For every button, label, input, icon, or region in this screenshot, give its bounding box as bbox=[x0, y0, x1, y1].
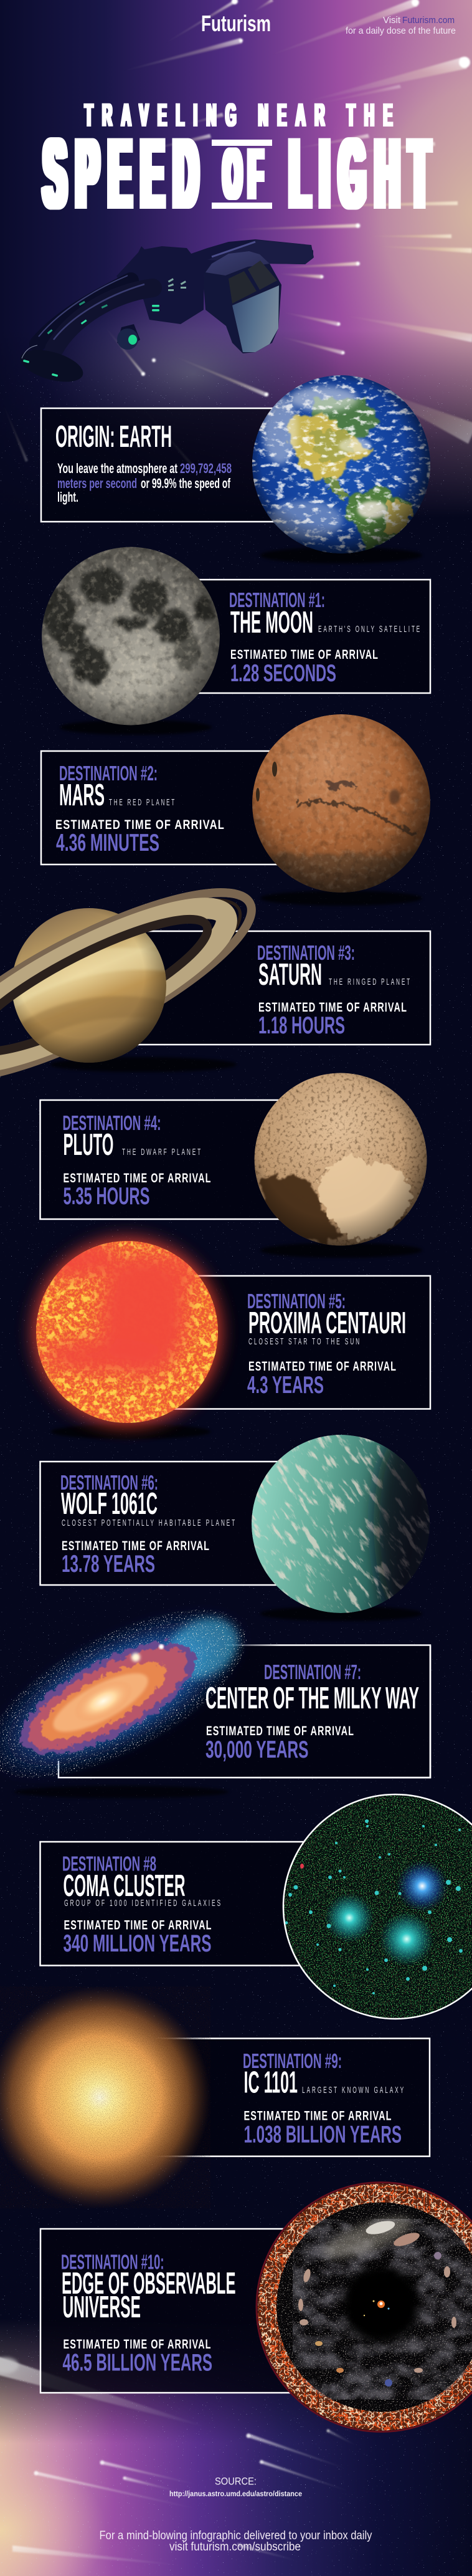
header: tagline: Visit bbox=[383, 15, 401, 26]
panel: Wolf 1061c bbox=[40, 1381, 472, 1668]
header: tagline: Futurism.com bbox=[402, 15, 455, 26]
destination 10 text bbox=[61, 2250, 235, 2376]
destination 3 text bbox=[257, 941, 412, 1039]
light streak heads: top bbox=[141, 0, 470, 396]
destination 1 text: 1.28 SECONDS bbox=[230, 660, 336, 687]
destination 7 text: 30,000 YEARS bbox=[205, 1736, 309, 1763]
destination 1 text: DESTINATION #1: bbox=[229, 588, 325, 611]
destination 10 text: ESTIMATED TIME OF ARRIVAL bbox=[64, 2337, 212, 2352]
destination 6 text: CLOSEST POTENTIALLY HABITABLE PLANET bbox=[62, 1518, 237, 1528]
galaxy bbox=[0, 1573, 274, 1815]
source bbox=[169, 2476, 302, 2498]
destination 1 text: ESTIMATED TIME OF ARRIVAL bbox=[230, 648, 379, 662]
destination 3 text: 1.18 HOURS bbox=[258, 1012, 345, 1039]
star: Proxima Centauri bbox=[31, 1238, 220, 1425]
image: Coma Cluster bbox=[283, 1794, 472, 2019]
panel: Mars bbox=[41, 714, 430, 906]
destination 9 text bbox=[243, 2049, 405, 2148]
destination 4 text: THE DWARF PLANET bbox=[122, 1147, 202, 1157]
destination 2 text bbox=[55, 762, 225, 856]
light streaks: top bbox=[0, 0, 472, 466]
destination 6 text: WOLF 1061C bbox=[61, 1487, 158, 1521]
destination 8 text: DESTINATION #8 bbox=[62, 1852, 156, 1875]
panel: IC 1101 bbox=[0, 1986, 430, 2208]
origin text bbox=[57, 461, 232, 505]
origin text: You leave the atmosphere at bbox=[57, 461, 177, 476]
header: tagline bbox=[346, 15, 456, 36]
origin text: meters per second bbox=[57, 476, 137, 491]
destination 7 text: ESTIMATED TIME OF ARRIVAL bbox=[206, 1724, 354, 1738]
spaceship bbox=[17, 239, 314, 388]
light streaks: bottom bbox=[0, 2356, 358, 2565]
destination 1 text: THE MOON bbox=[230, 606, 313, 639]
title: OF bbox=[224, 136, 270, 213]
panel: Saturn bbox=[0, 860, 430, 1111]
destination 10 text: UNIVERSE bbox=[62, 2291, 141, 2324]
destination 3 text: DESTINATION #3: bbox=[257, 941, 355, 964]
source: SOURCE: bbox=[215, 2476, 257, 2487]
destination 6 text: ESTIMATED TIME OF ARRIVAL bbox=[62, 1539, 210, 1553]
destination 8 text: 340 MILLION YEARS bbox=[64, 1930, 212, 1957]
destination 3 text: SATURN bbox=[258, 958, 322, 992]
destination 9 text: IC 1101 bbox=[244, 2066, 298, 2099]
origin text: or 99.9% the speed of bbox=[141, 476, 230, 491]
origin text: light. bbox=[57, 489, 78, 505]
destination 4 text: 5.35 HOURS bbox=[64, 1183, 149, 1210]
heading: origin: ORIGIN: EARTH bbox=[55, 420, 172, 454]
image: observable universe bbox=[257, 2182, 472, 2432]
destination 5 text bbox=[247, 1290, 406, 1399]
footer call to action: visit futurism.com/subscribe bbox=[169, 2540, 301, 2554]
panel: Edge of Observable Universe bbox=[40, 2182, 472, 2432]
destination 5 text: 4.3 YEARS bbox=[247, 1372, 324, 1399]
footer call to action bbox=[100, 2529, 372, 2554]
panel: Edge of Observable Universe: EDGE OF OBSERVABLE bbox=[62, 2267, 235, 2301]
destination 2 text: 4.36 MINUTES bbox=[56, 830, 159, 856]
destination 6 text: 13.78 YEARS bbox=[62, 1551, 155, 1578]
destination 4 text: ESTIMATED TIME OF ARRIVAL bbox=[64, 1171, 212, 1185]
destination 8 text: COMA CLUSTER bbox=[64, 1869, 186, 1903]
destination 4 text bbox=[62, 1111, 212, 1210]
origin text: 299,792,458 bbox=[180, 461, 232, 476]
destination 8 text: ESTIMATED TIME OF ARRIVAL bbox=[64, 1918, 212, 1932]
header: Futurism logo: Futurism bbox=[201, 11, 271, 36]
destination 9 text: DESTINATION #9: bbox=[243, 2049, 342, 2072]
destination 5 text: DESTINATION #5: bbox=[247, 1290, 346, 1313]
planet: Saturn with rings bbox=[0, 888, 256, 1077]
galaxy glow: IC 1101 bbox=[0, 1986, 210, 2208]
planet: Moon bbox=[42, 547, 220, 725]
destination 1 text bbox=[229, 588, 422, 687]
destination 10 text: DESTINATION #10: bbox=[61, 2250, 164, 2274]
panel: Coma Cluster bbox=[40, 1794, 472, 2019]
planet: Earth bbox=[252, 375, 430, 553]
panel: Center of the Milky Way bbox=[0, 1573, 430, 1815]
destination 5 text: ESTIMATED TIME OF ARRIVAL bbox=[248, 1359, 397, 1374]
destination 7 text bbox=[205, 1660, 419, 1763]
destination 2 text: MARS bbox=[59, 778, 105, 812]
destination 9 text: ESTIMATED TIME OF ARRIVAL bbox=[244, 2109, 392, 2123]
destination 3 text: ESTIMATED TIME OF ARRIVAL bbox=[258, 1000, 407, 1015]
header: tagline: for a daily dose of the future bbox=[346, 26, 456, 36]
destination 2 text: THE RED PLANET bbox=[109, 797, 176, 808]
destination 2 text: ESTIMATED TIME OF ARRIVAL bbox=[55, 818, 225, 832]
destination 7 text: DESTINATION #7: bbox=[264, 1660, 361, 1683]
source: http://janus.astro.umd.edu/astro/distance bbox=[169, 2491, 302, 2498]
destination 6 text bbox=[60, 1471, 237, 1578]
planet: Mars bbox=[252, 714, 430, 898]
destination 10 text: 46.5 BILLION YEARS bbox=[62, 2350, 212, 2376]
panel: the Moon bbox=[42, 547, 430, 735]
planet: Wolf 1061c bbox=[197, 1381, 472, 1668]
destination 4 text: PLUTO bbox=[64, 1128, 113, 1162]
panel: Pluto bbox=[40, 1073, 430, 1258]
panel: origin Earth bbox=[41, 375, 430, 563]
destination 6 text: DESTINATION #6: bbox=[60, 1471, 158, 1494]
destination 5 text: CLOSEST STAR TO THE SUN bbox=[248, 1336, 361, 1347]
footer call to action: For a mind-blowing infographic delivered to your inbox daily bbox=[100, 2529, 372, 2542]
destination 2 text: DESTINATION #2: bbox=[59, 762, 158, 785]
destination 8 text: GROUP OF 1000 IDENTIFIED GALAXIES bbox=[64, 1898, 222, 1908]
destination 8 text bbox=[62, 1852, 222, 1957]
planet: Pluto bbox=[254, 1073, 430, 1247]
panel: Proxima Centauri bbox=[31, 1238, 430, 1439]
destination 4 text: DESTINATION #4: bbox=[62, 1111, 161, 1134]
